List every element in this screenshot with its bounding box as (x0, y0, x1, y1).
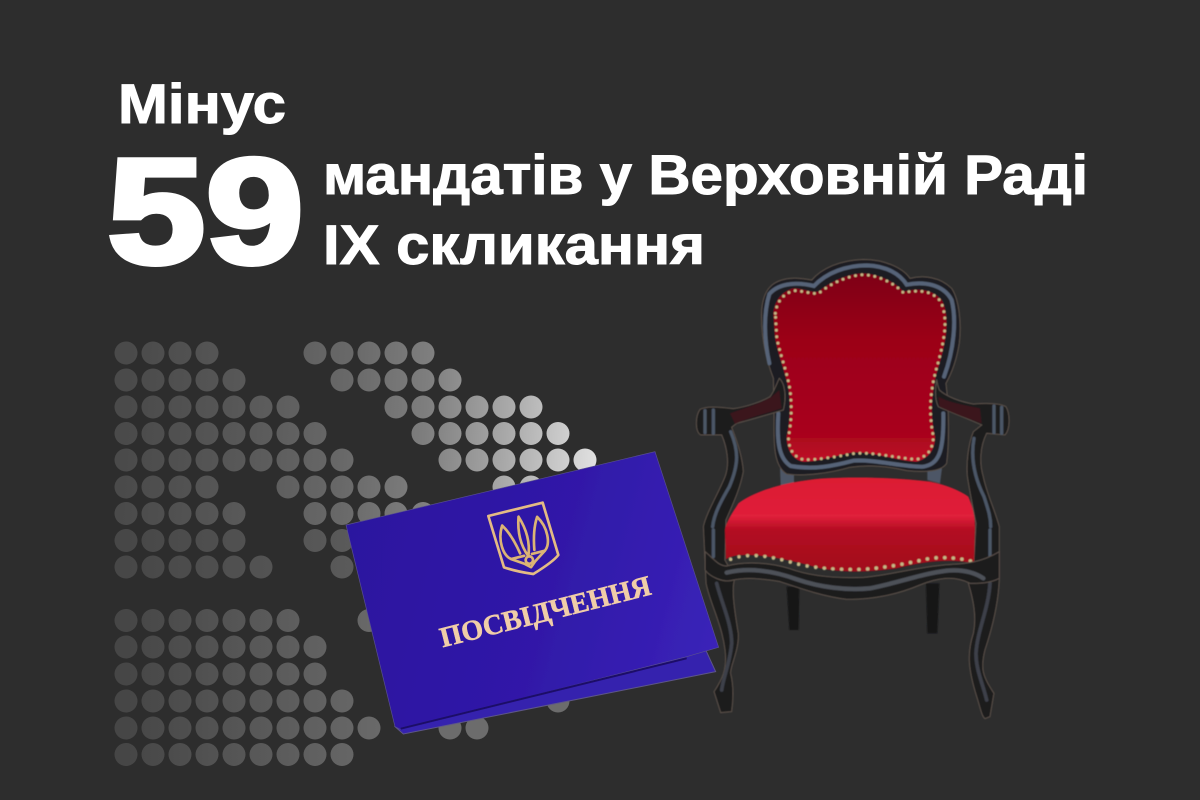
chair back upholstery (773, 273, 946, 462)
chair left arm and front leg (696, 378, 785, 713)
title: line one: мандатів у Верховній Раді (323, 143, 1088, 206)
title: line two: IX скликання (323, 213, 705, 276)
dots: upper bright rows (114, 342, 596, 525)
chair back nails (775, 275, 945, 460)
card cover (346, 452, 719, 729)
chair back legs (780, 468, 942, 633)
icon: red armchair (696, 259, 1009, 719)
chair right arm and front leg (936, 380, 1009, 719)
title: minus: Мінус (118, 72, 286, 135)
title: big number: 59 (107, 127, 304, 295)
chair leg highlights (717, 583, 990, 700)
chair front rail (705, 552, 999, 599)
chair arm highlights (705, 406, 1002, 557)
chair seat (725, 477, 975, 572)
card bottom flap (395, 648, 716, 734)
card fold shadow (401, 658, 687, 729)
chair arm maroon wood (730, 390, 982, 424)
dots: lower rows (114, 609, 570, 766)
card label: ПОСВІДЧЕННЯ (437, 570, 655, 654)
dots: middle dim rows (114, 529, 354, 578)
chair rail highlight (727, 570, 983, 589)
chair seat nails (731, 556, 971, 569)
dotted map pattern (114, 342, 596, 766)
chair back frame (762, 259, 960, 475)
icon: ID card (346, 452, 719, 734)
title (107, 72, 1088, 295)
emblem: shield and trident (488, 503, 558, 574)
chair back frame highlight (765, 265, 954, 468)
